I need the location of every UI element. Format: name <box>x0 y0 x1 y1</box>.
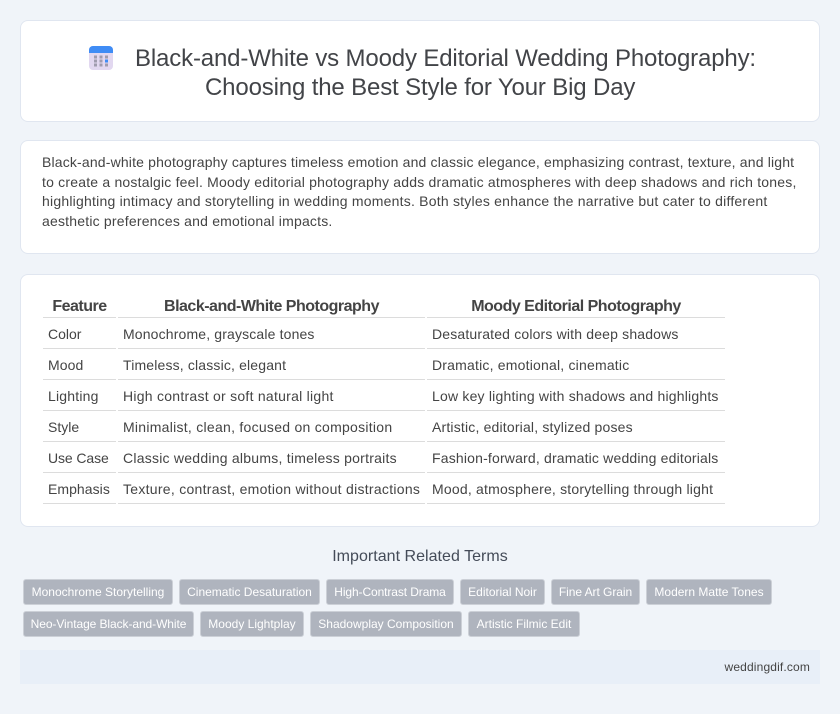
tag: Moody Lightplay <box>208 617 296 631</box>
table header row <box>52 298 682 315</box>
description text: aesthetic preferences and emotional impacts. <box>42 213 333 229</box>
table header row: Moody Editorial Photography <box>471 298 681 315</box>
footer bar <box>20 650 820 684</box>
row: use case: Use Case <box>48 450 109 466</box>
row: color <box>48 326 679 342</box>
row: mood: Dramatic, emotional, cinematic <box>432 357 629 373</box>
header panel <box>20 20 820 122</box>
row: mood <box>48 357 629 373</box>
related terms heading: Important Related Terms <box>332 548 508 565</box>
description text: Black-and-white photography captures timeless emotion and classic elegance, emphasizing contrast, texture, and light <box>42 154 794 170</box>
table header row: Black-and-White Photography <box>164 298 379 315</box>
description text: highlighting intimacy and storytelling in wedding moments. Both styles enhance the narrative but cater to different <box>42 193 767 209</box>
row: emphasis: Texture, contrast, emotion without distractions <box>123 481 420 497</box>
tag: Fine Art Grain <box>559 585 632 599</box>
row: use case: Fashion-forward, dramatic wedding editorials <box>432 450 718 466</box>
row: lighting <box>48 388 719 404</box>
tag <box>326 579 454 605</box>
tag <box>460 579 545 605</box>
description text: to create a nostalgic feel. Moody editorial photography adds dramatic atmospheres with deep shadows and rich tones, <box>42 174 797 190</box>
related terms tags <box>23 579 772 637</box>
row: use case: Classic wedding albums, timeless portraits <box>123 450 397 466</box>
row: style: Minimalist, clean, focused on composition <box>123 419 392 435</box>
tag <box>200 611 304 637</box>
row: style: Style <box>48 419 79 435</box>
row: use case <box>48 450 718 466</box>
row: style: Artistic, editorial, stylized poses <box>432 419 633 435</box>
text: Choosing the Best Style for Your Big Day <box>205 74 635 101</box>
footer source: weddingdif.com <box>725 660 810 674</box>
description text <box>42 154 797 229</box>
row: lighting: Lighting <box>48 388 99 404</box>
tag <box>551 579 640 605</box>
tag: Shadowplay Composition <box>318 617 454 631</box>
row: lighting: High contrast or soft natural light <box>123 388 334 404</box>
row: mood: Mood <box>48 357 83 373</box>
tag <box>23 611 194 637</box>
row: style <box>48 419 633 435</box>
tag <box>468 611 580 637</box>
tag: Monochrome Storytelling <box>32 585 164 599</box>
tag: Cinematic Desaturation <box>187 585 312 599</box>
row: color: Desaturated colors with deep shadows <box>432 326 679 342</box>
text: Black-and-White vs Moody Editorial Wedding Photography: <box>135 45 756 72</box>
table header row: Feature <box>52 298 107 315</box>
row: color: Color <box>48 326 81 342</box>
tag <box>646 579 772 605</box>
row: mood: Timeless, classic, elegant <box>123 357 286 373</box>
tag: Editorial Noir <box>468 585 537 599</box>
row: emphasis: Mood, atmosphere, storytelling through light <box>432 481 713 497</box>
tag <box>23 579 173 605</box>
tag: Neo-Vintage Black-and-White <box>31 617 186 631</box>
tag: High-Contrast Drama <box>334 585 446 599</box>
tag: Modern Matte Tones <box>654 585 764 599</box>
icon: calendar <box>89 46 113 70</box>
tag <box>179 579 320 605</box>
tag: Artistic Filmic Edit <box>477 617 571 631</box>
comparison table panel <box>20 274 820 527</box>
row: lighting: Low key lighting with shadows and highlights <box>432 388 719 404</box>
title <box>135 45 756 101</box>
row: emphasis: Emphasis <box>48 481 110 497</box>
row: color: Monochrome, grayscale tones <box>123 326 315 342</box>
description panel <box>20 140 820 254</box>
comparison table <box>43 298 725 504</box>
tag <box>310 611 462 637</box>
row: emphasis <box>48 481 713 497</box>
